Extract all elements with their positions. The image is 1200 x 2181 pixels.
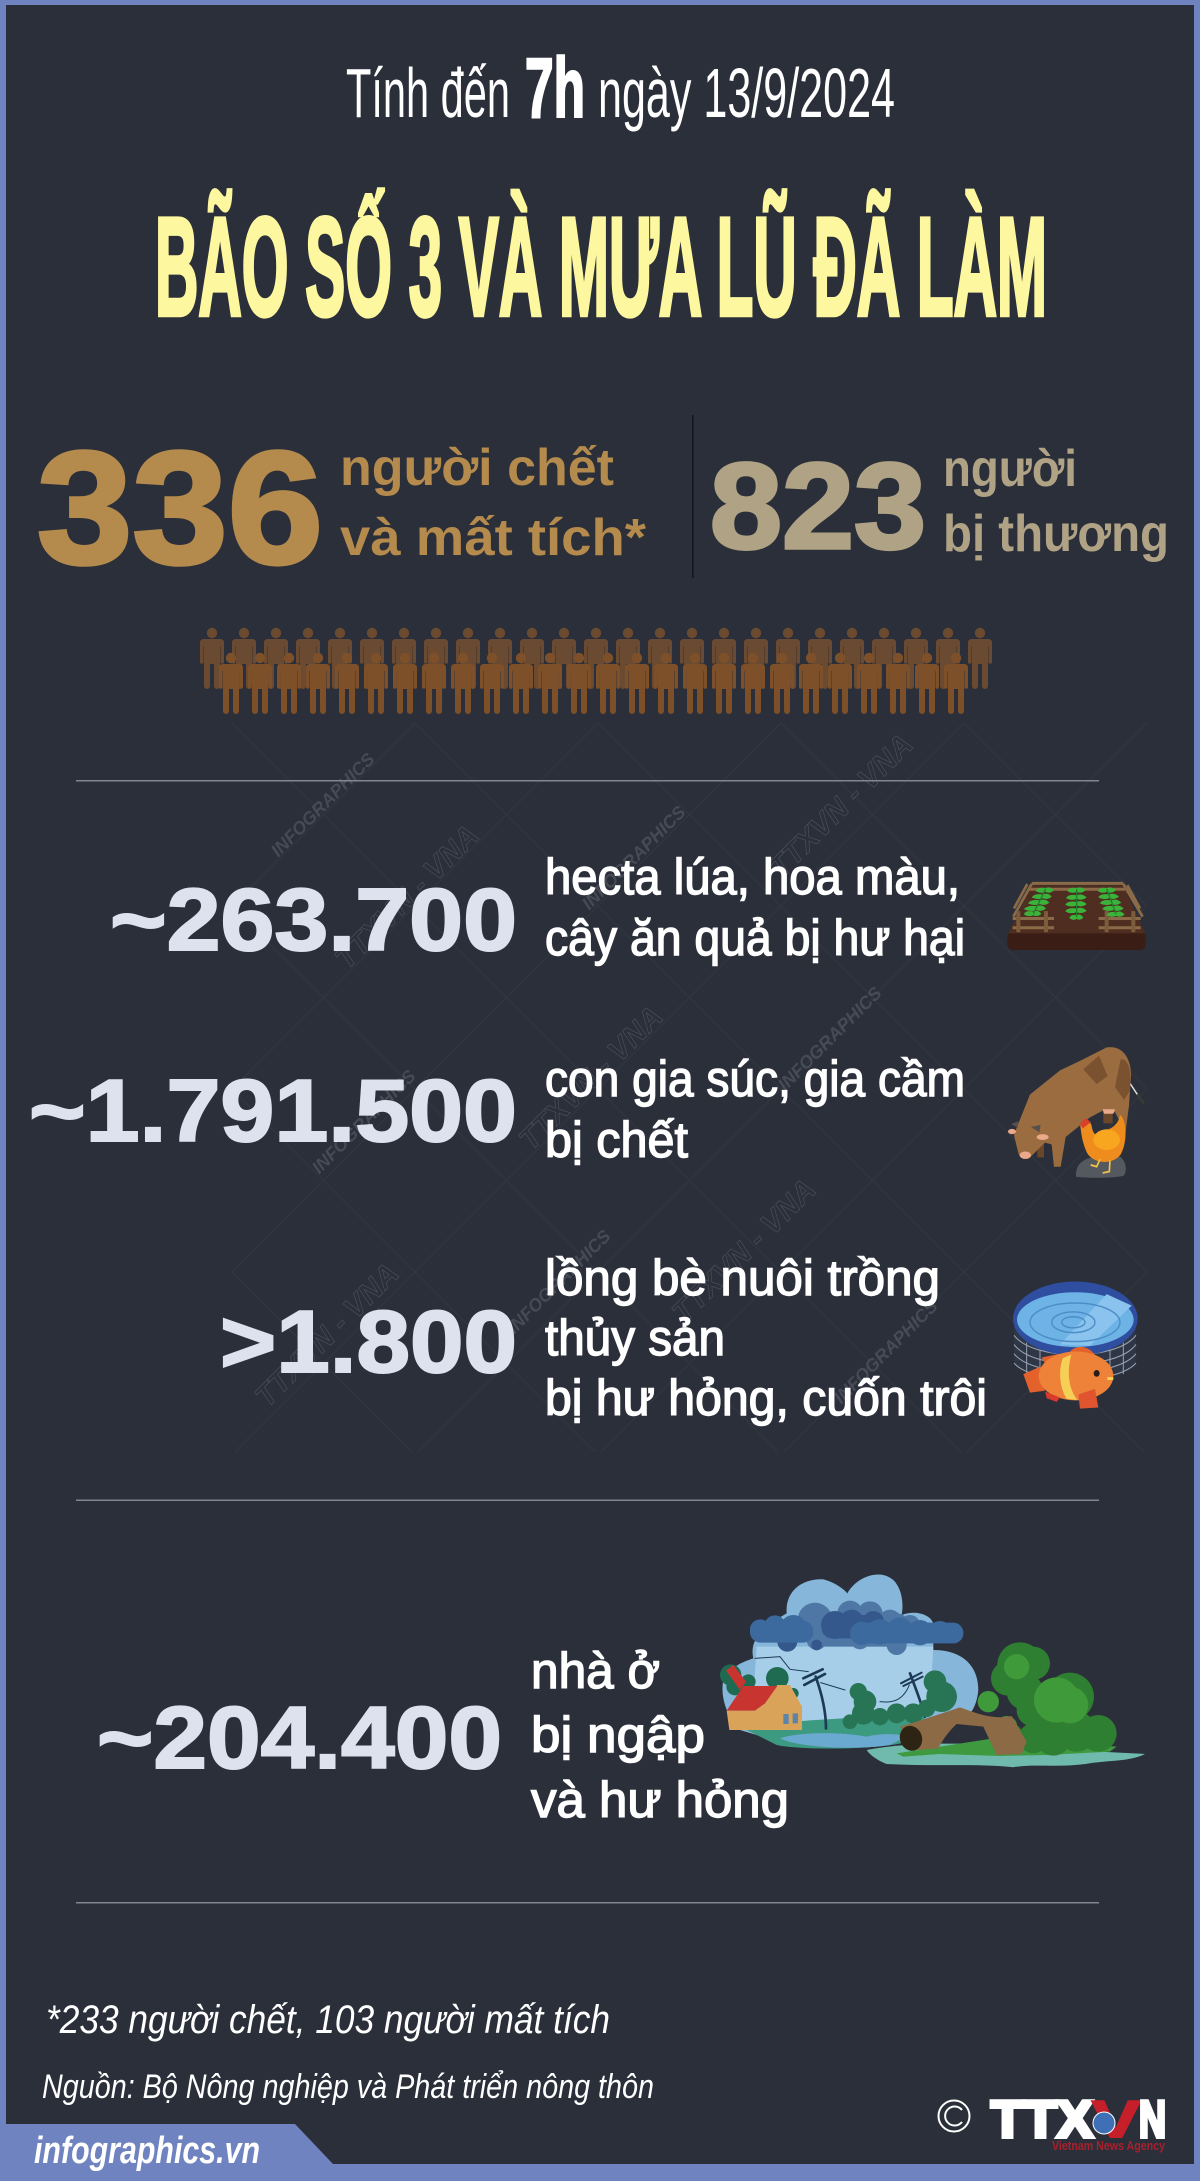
label: houses <box>531 1643 789 1828</box>
copyright symbol <box>938 2100 970 2132</box>
number: cages: >1.800 <box>220 1292 517 1391</box>
label: cages: thủy sản <box>545 1310 725 1366</box>
watermarks: TTXVN - VNA <box>763 728 920 885</box>
stat: 823 injured: người <box>943 440 1077 498</box>
row: livestock <box>29 1047 1144 1178</box>
number: livestock: ~1.791.500 <box>29 1061 517 1160</box>
label: cages <box>545 1250 987 1426</box>
watermarks: INFOGRAPHICS <box>578 802 690 914</box>
label: houses: bị ngập <box>531 1707 705 1763</box>
label: livestock <box>545 1051 965 1168</box>
label: livestock: bị chết <box>545 1112 688 1168</box>
stat: 336 dead and missing <box>37 418 647 597</box>
website: infographics.vn <box>34 2130 260 2172</box>
watermarks: TTXVN - VNA <box>329 819 486 976</box>
row: fish cages <box>220 1250 1138 1426</box>
logo: TTXVN: Vietnam News Agency <box>1052 2138 1166 2153</box>
watermarks: INFOGRAPHICS <box>830 1296 942 1408</box>
number: houses: ~204.400 <box>97 1688 502 1787</box>
number: hectares: ~263.700 <box>110 870 517 969</box>
watermarks: INFOGRAPHICS <box>308 1066 420 1178</box>
footnote: *233 người chết, 103 người mất tích <box>46 1998 610 2042</box>
footer tab <box>6 2124 333 2164</box>
logo: TTXVN: TTX <box>991 2091 1093 2149</box>
people icons row <box>200 628 992 714</box>
label: houses: nhà ở <box>531 1643 660 1699</box>
watermarks: INFOGRAPHICS <box>503 1226 615 1338</box>
label: houses: và hư hỏng <box>531 1772 789 1828</box>
logo: TTXVN <box>991 2091 1166 2153</box>
stat: 336 dead and missing: người chết <box>340 439 614 497</box>
watermark lattice <box>232 723 1147 1452</box>
label: cages: bị hư hỏng, cuốn trôi <box>545 1370 987 1426</box>
logo: TTXVN: N <box>1139 2091 1166 2149</box>
label: crops: cây ăn quả bị hư hại <box>545 910 965 966</box>
icon: storm scene <box>720 1575 1145 1767</box>
stat: 336 dead and missing: và mất tích* <box>340 509 647 567</box>
date line: Tính đến <box>346 54 510 132</box>
stat: 823 injured: bị thương <box>943 505 1169 563</box>
label: crops <box>545 849 965 966</box>
icon: field with fence <box>1007 883 1146 950</box>
watermarks: TTXVN - VNA <box>666 1173 823 1330</box>
watermarks: TTXVN - VNA <box>249 1257 406 1414</box>
row: houses <box>97 1575 1145 1828</box>
source: Nguồn: Bộ Nông nghiệp và Phát triển nông thôn <box>42 2068 654 2106</box>
label: crops: hecta lúa, hoa màu, <box>545 849 960 905</box>
separators <box>76 780 1099 1904</box>
date line: ngày 13/9/2024 <box>598 54 895 132</box>
watermarks: TTXVN - VNA <box>513 1000 670 1157</box>
logo: TTXVN: V <box>1092 2091 1140 2149</box>
divider <box>692 415 694 578</box>
watermarks: INFOGRAPHICS <box>774 983 886 1095</box>
icon: cow and chicken <box>1008 1047 1144 1178</box>
stat: 823 injured <box>710 438 1169 574</box>
date line <box>346 41 895 135</box>
stat: 336 dead and missing: 336 <box>37 418 323 597</box>
label: livestock: con gia súc, gia cầm <box>545 1051 965 1107</box>
icon: fish tank with fish <box>1013 1282 1138 1409</box>
stat: 823 injured: 823 <box>710 438 926 574</box>
row: crops damaged <box>110 849 1146 969</box>
label: cages: lồng bè nuôi trồng <box>545 1250 940 1306</box>
watermarks <box>249 728 942 1414</box>
watermarks: INFOGRAPHICS <box>267 749 379 861</box>
date line: 7h <box>525 41 585 135</box>
